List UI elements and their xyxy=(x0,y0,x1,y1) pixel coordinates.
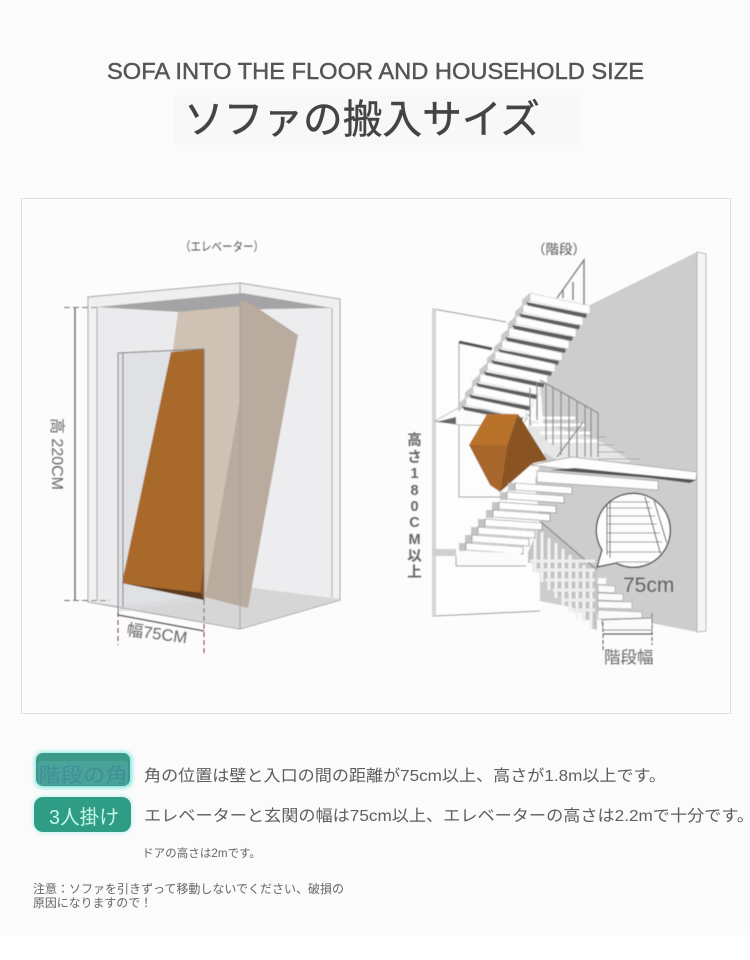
button: stair corner: 階段の角 xyxy=(38,764,128,787)
upper flight of stairs xyxy=(458,293,590,422)
label: height 180cm or more: 0 xyxy=(410,499,419,515)
text: door height: ドアの高さは2mです。 xyxy=(142,847,261,860)
top railing xyxy=(557,260,584,305)
middle stairs behind railing xyxy=(525,418,640,462)
label: 75cm: 75cm xyxy=(623,574,674,597)
label: height 180cm or more: 高 xyxy=(407,432,422,449)
label: elevator: （エレベーター） xyxy=(180,240,264,254)
dimension: stair width xyxy=(603,613,654,667)
elevator floor xyxy=(88,588,340,628)
label: stairs: （階段） xyxy=(532,242,586,257)
grey wall xyxy=(535,252,697,632)
lower stepped balustrade xyxy=(528,522,597,630)
door outline xyxy=(118,349,204,612)
elevator ceiling xyxy=(97,293,332,312)
label: height 180cm or more: 1 xyxy=(410,466,419,482)
lower flight of stairs xyxy=(459,483,572,554)
title: English heading: SOFA INTO THE FLOOR AND HOUSEHOLD SIZE xyxy=(107,58,644,84)
label: height 180cm or more: 上 xyxy=(407,564,422,581)
label: height 180cm or more: さ xyxy=(407,449,422,466)
text: caution note: 原因になりますので！ xyxy=(33,896,152,910)
dimension: height: 高 220CM xyxy=(48,418,66,490)
sofa seen through the elevator xyxy=(150,300,298,608)
dimension: height xyxy=(48,308,110,600)
dimension: stair width: 階段幅 xyxy=(604,648,654,667)
upper railing xyxy=(530,380,598,457)
label: height 180cm or more: 8 xyxy=(410,483,419,499)
button: three seater xyxy=(33,796,132,833)
elevator outline xyxy=(88,283,340,629)
callout: stair magnifier xyxy=(596,493,670,570)
left wall xyxy=(432,309,540,616)
label: height 180cm or more: C xyxy=(409,515,420,531)
sofa box on the stairs xyxy=(469,414,547,492)
dimension: width: 幅75CM xyxy=(125,620,188,647)
diagram: elevator xyxy=(48,240,340,655)
diagram: staircase xyxy=(407,242,706,667)
label: height 180cm or more: 以 xyxy=(407,549,422,565)
elevator box walls xyxy=(88,283,340,629)
middle landing xyxy=(530,457,697,490)
white pillar xyxy=(697,252,706,632)
title: Japanese heading: ソファの搬入サイズ xyxy=(184,98,540,142)
button: three seater: 3人掛け xyxy=(49,806,119,829)
text: caution note: 注意：ソファを引きずって移動しないでください、破損の xyxy=(33,881,344,896)
sofa in the door xyxy=(122,349,204,600)
lower right flight of stairs xyxy=(598,578,652,630)
dimension: width xyxy=(118,600,204,655)
label: height 180cm or more: M xyxy=(408,532,421,548)
button: stair corner xyxy=(35,752,132,788)
text: elevator rule: エレベーターと玄関の幅は75cm以上、エレベーターの高さは2.2mで十分です。 xyxy=(144,807,750,825)
upper landing xyxy=(435,407,530,426)
text: corner rule: 角の位置は壁と入口の間の距離が75cm以上、高さが1.8m以上です。 xyxy=(144,767,666,785)
lower landing xyxy=(432,549,526,566)
door opening xyxy=(118,349,204,612)
panel: diagrams frame xyxy=(22,198,730,714)
